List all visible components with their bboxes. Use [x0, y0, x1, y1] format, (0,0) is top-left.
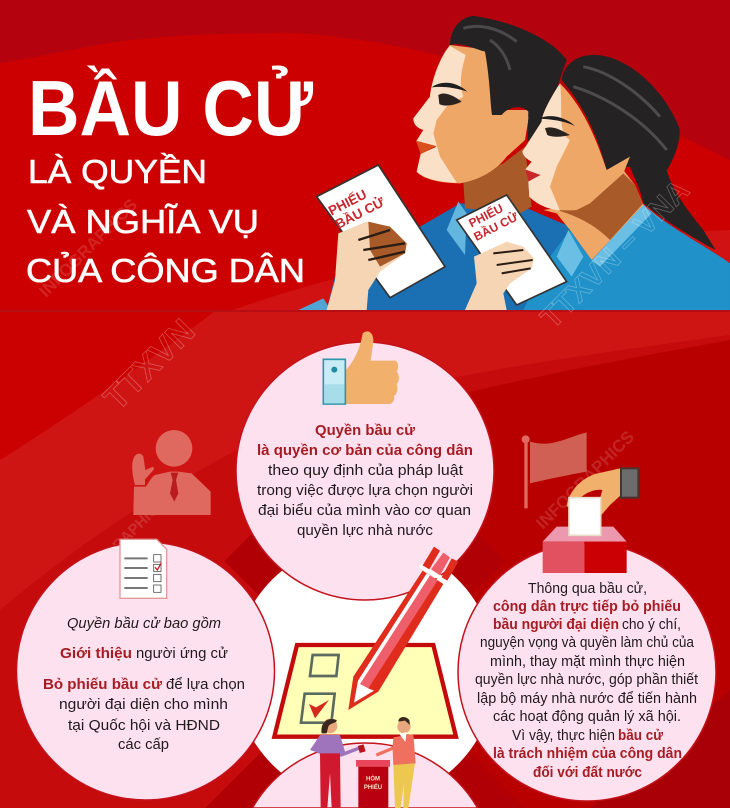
icon: thumbs up — [323, 331, 399, 404]
text: right circle: đối với đất nước — [533, 764, 642, 781]
header background — [0, 0, 730, 311]
text: left circle: người ứng cử — [136, 645, 228, 662]
watermarks — [35, 174, 696, 588]
text: left circle: Giới thiệu — [60, 645, 132, 662]
watermarks: INFOGRAPHICS — [76, 494, 169, 588]
text: right circle — [475, 580, 699, 781]
panel: left circle — [16, 539, 274, 800]
ballot label 2: BẦU CỬ — [471, 209, 521, 244]
diagonal dark bands — [205, 534, 525, 808]
ballot label 1: PHIẾU — [326, 187, 369, 218]
text: left circle: các cấp — [118, 736, 169, 753]
ballot paper — [274, 645, 456, 737]
text: right circle: công dân trực tiếp bỏ phiếu — [493, 598, 681, 615]
text: top circle: Quyền bầu cử — [315, 422, 415, 439]
text: left circle: Bỏ phiếu bầu cử — [43, 676, 162, 693]
text: top circle: trong việc được lựa chọn người — [257, 482, 473, 499]
text: top circle — [257, 422, 473, 539]
title line 3: VÀ NGHĨA VỤ — [27, 203, 259, 240]
text: right circle: các hoạt động quản lý xã hội. — [493, 708, 681, 725]
icon: checklist — [120, 539, 167, 598]
text: right circle: bầu người đại diện — [493, 616, 619, 633]
icon: hand dropping ballot in box — [543, 468, 638, 573]
text: right circle: là trách nhiệm của công dân — [493, 745, 682, 762]
text: right circle: Vì vậy, thực hiện — [512, 727, 615, 744]
text: right circle: lập bộ máy nhà nước để tiến hành — [477, 690, 697, 707]
ballot box: HÒM — [366, 774, 380, 782]
ballot label 1: BẦU CỬ — [333, 194, 388, 232]
text: right circle: mình, thay mặt mình thực hiện — [490, 653, 685, 670]
icon: flag — [522, 432, 587, 508]
watermarks: INFOGRAPHICS — [35, 195, 141, 301]
voter: woman — [310, 719, 366, 808]
pencil — [348, 547, 458, 710]
ballot label 2: PHIẾU — [466, 200, 505, 230]
ballot box — [356, 760, 390, 808]
panel: bottom circle — [252, 743, 478, 808]
watermarks: TTXVN — [97, 312, 202, 418]
panel: top circle — [236, 331, 494, 600]
text: right circle: Thông qua bầu cử, — [528, 580, 647, 597]
title line 4: CỦA CÔNG DÂN — [26, 252, 305, 289]
text: top circle: quyền lực nhà nước — [297, 522, 433, 539]
ballot label 1 — [326, 181, 388, 232]
text: top circle: là quyền cơ bản của công dân — [257, 442, 473, 459]
text: left circle: Quyền bầu cử bao gồm — [67, 615, 221, 632]
white centre disc — [234, 541, 496, 803]
text: left circle: người đại diện cho mình — [59, 696, 228, 713]
illustration: ballot, pencil and voters — [274, 547, 458, 808]
text: right circle: bầu cử — [618, 727, 663, 744]
watermarks: TTXVN – VNA — [535, 174, 696, 335]
text: left circle: để lựa chọn — [166, 676, 245, 693]
panel: right circle — [458, 543, 716, 801]
voter: man — [376, 717, 416, 808]
illustration: two citizens holding ballots — [298, 16, 730, 310]
text: top circle: theo quy định của pháp luật — [268, 462, 464, 479]
text: left circle: tại Quốc hội và HĐND — [68, 717, 220, 734]
ballot label 2 — [464, 196, 521, 244]
watermarks: INFOGRAPHICS — [532, 427, 638, 533]
text: right circle: quyền lực nhà nước, góp phần thiết — [475, 671, 699, 688]
title — [26, 64, 313, 289]
text: right circle: cho ý chí, — [622, 616, 681, 633]
text: right circle: nguyện vọng và quyền làm chủ của — [480, 634, 695, 651]
ballot box: PHIẾU — [364, 784, 382, 791]
title main line: BẦU CỬ — [28, 64, 313, 152]
text: left circle — [43, 615, 245, 753]
text: top circle: đại biểu của mình vào cơ quan — [258, 502, 471, 519]
icon: raised-hand person — [132, 430, 211, 515]
header bottom edge — [0, 310, 730, 312]
title line 2: LÀ QUYỀN — [28, 153, 207, 190]
